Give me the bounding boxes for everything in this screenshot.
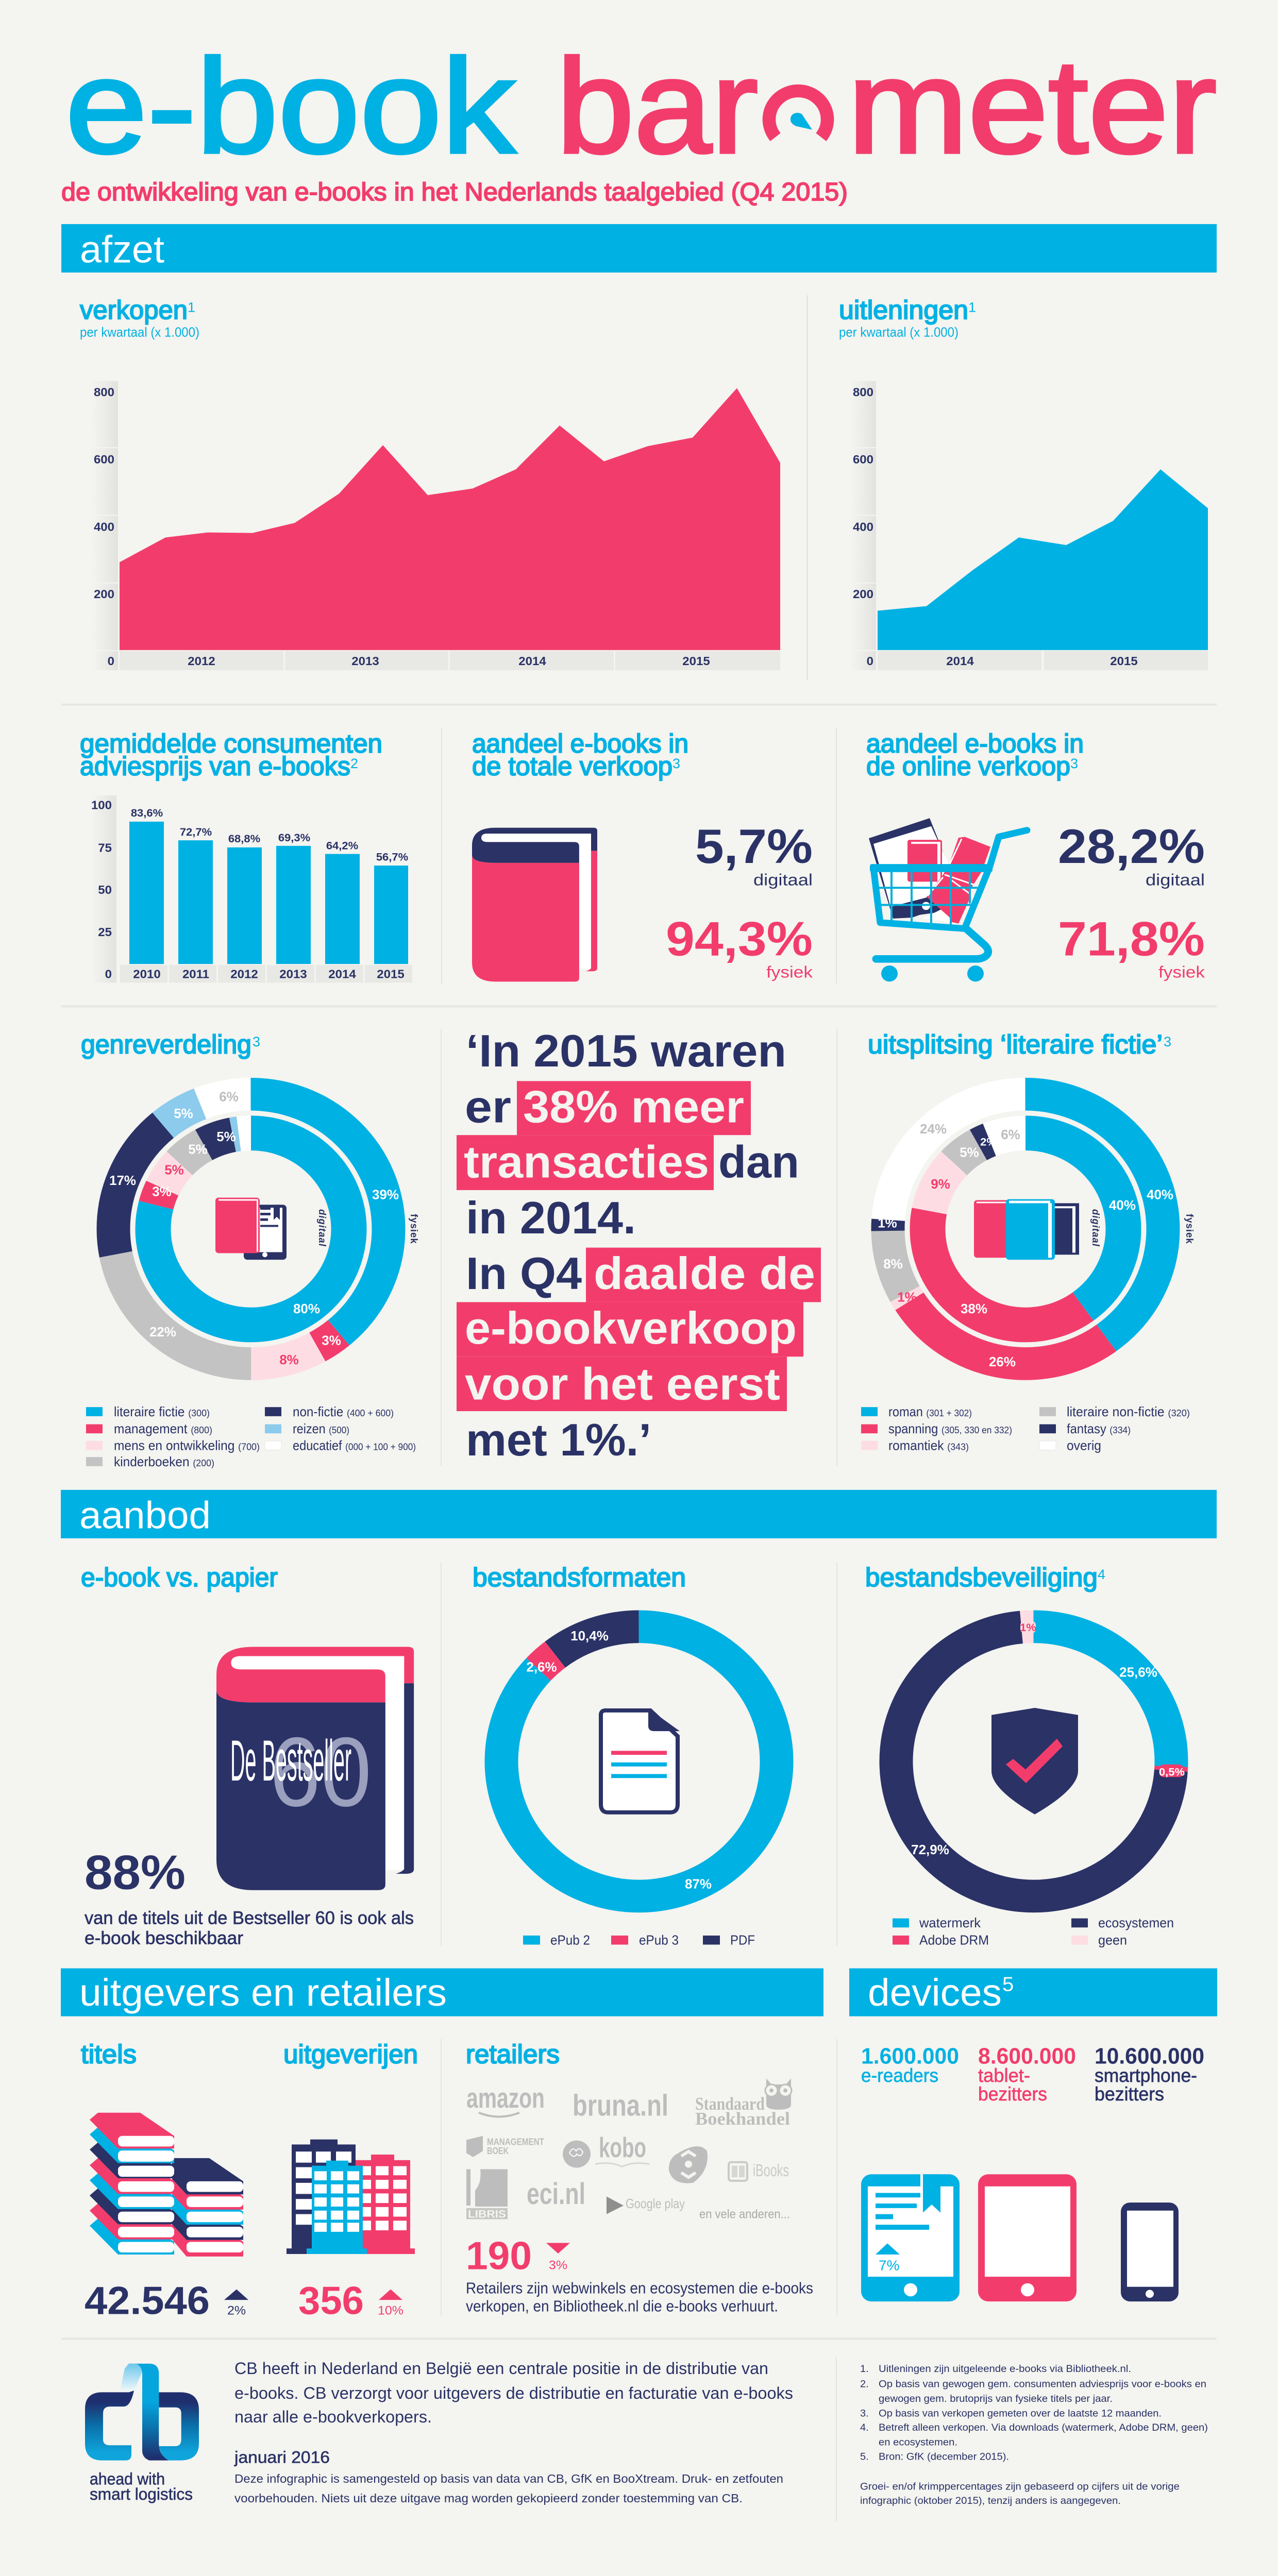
text: about CB: januari 2016 [234, 2448, 330, 2466]
donut chart: genreverdeling: 3% [152, 1185, 172, 1199]
bar chart: adviesprijs: 72,7% [180, 825, 212, 838]
area chart: uitleningen: 600 [853, 453, 873, 466]
figure: 190: 190 [466, 2234, 532, 2278]
legend: bestandsbeveiliging [893, 1916, 1174, 1947]
panel: uitsplitsing literaire fictie [861, 1029, 1195, 1453]
panel: uitleningen [839, 295, 1208, 670]
legend: genreverdeling: reizen (500) [293, 1422, 349, 1436]
bar chart: adviesprijs: 50 [98, 883, 112, 897]
panel: genreverdeling [81, 1029, 419, 1469]
bar chart: adviesprijs: 69,3% [278, 831, 310, 844]
area chart: uitleningen: 400 [853, 520, 873, 534]
legend: uitsplitsing: spanning (305, 330 en 332) [888, 1422, 1012, 1436]
panel: bestandsformaten [473, 1562, 777, 1947]
footnotes: Op basis van verkopen gemeten over de laatste 12 maanden. [879, 2408, 1162, 2419]
panel: titels [81, 2039, 248, 2323]
legend: bestandsformaten: ePub 3 [639, 1934, 679, 1947]
figure: smartphone-bezitters [1095, 2044, 1204, 2105]
legend: uitsplitsing: overig [1067, 1439, 1101, 1453]
bar chart: adviesprijs: 75 [98, 841, 112, 855]
donut chart: uitsplitsing: 40% [1109, 1198, 1136, 1213]
quote: met 1%.’ [466, 1414, 651, 1465]
text: about CB: voorbehouden. Niets uit deze uitgave mag worden gekopieerd zonder toestemming van CB. [234, 2492, 743, 2505]
footnotes: Groei- en/of krimppercentages zijn gebaseerd op cijfers uit de vorige [860, 2481, 1180, 2492]
section bar: aanbod: aanbod [79, 1494, 211, 1536]
legend: bestandsbeveiliging: Adobe DRM [919, 1934, 989, 1947]
donut chart: genreverdeling: 3% [322, 1334, 341, 1348]
heading: verkopen: 1 [188, 300, 195, 315]
section bar: devices: devices [868, 1971, 1002, 2014]
subtitle: de ontwikkeling van e-books in het Nederlands taalgebied (Q4 2015) [61, 178, 848, 206]
legend: bestandsbeveiliging: geen [1098, 1934, 1127, 1947]
logos: retailers: LIBRIS [468, 2208, 506, 2220]
legend: genreverdeling: literaire fictie (300) [114, 1405, 210, 1419]
figure: tablet-bezitters [978, 2044, 1076, 2105]
icon: e-reader [861, 2174, 960, 2301]
area chart: uitleningen: 0 [867, 654, 873, 668]
text: retailers description: Retailers zijn webwinkels en ecosystemen die e-books [466, 2279, 813, 2297]
quote: in 2014. [466, 1192, 636, 1243]
figure: 356: 356 [298, 2279, 364, 2323]
section bar: devices: 5 [1002, 1973, 1014, 1996]
area chart: uitleningen: 800 [853, 385, 873, 399]
icon: buildings [287, 2140, 415, 2254]
bar chart: adviesprijs: 83,6% [131, 806, 163, 819]
title: bar [557, 31, 758, 181]
panel: aandeel online verkoop [866, 728, 1205, 981]
donut chart: bestandsformaten [501, 1626, 777, 1896]
bar chart: adviesprijs: 25 [98, 925, 112, 939]
heading: uitsplitsing: 3 [1164, 1034, 1171, 1049]
figure: 42.546: 2% [227, 2304, 246, 2317]
donut chart: genreverdeling: 5% [188, 1143, 208, 1157]
heading: totale verkoop: 3 [672, 756, 680, 771]
legend: bestandsbeveiliging: ecosystemen [1098, 1916, 1174, 1930]
footnotes: gewogen gem. brutoprijs van fysieke titels per jaar. [879, 2393, 1113, 2404]
donut chart: uitsplitsing [878, 1094, 1195, 1369]
donut chart: genreverdeling: 22% [149, 1325, 176, 1340]
heading: bestandsbeveiliging: bestandsbeveiliging [865, 1562, 1098, 1592]
heading: adviesprijs [80, 728, 382, 781]
legend: bestandsformaten: PDF [730, 1934, 755, 1947]
heading: verkopen [80, 295, 199, 340]
figure: smartphone-bezitters: bezitters [1095, 2083, 1164, 2105]
figure: smartphone-bezitters: smartphone- [1095, 2064, 1197, 2086]
donut chart: uitsplitsing: 26% [989, 1355, 1016, 1369]
figure: tablet-bezitters: 8.600.000 [978, 2044, 1076, 2069]
icon: smartphone [1121, 2202, 1179, 2301]
area chart: verkopen: 0 [108, 654, 114, 668]
donut chart: uitsplitsing: 1% [897, 1291, 917, 1304]
logo: CB: smart logistics [90, 2484, 193, 2503]
figure: 356 [298, 2279, 403, 2323]
heading: bestandsbeveiliging: 4 [1098, 1567, 1105, 1582]
bar chart: adviesprijs: 2014 [328, 968, 356, 981]
donut chart: uitsplitsing: 2% [980, 1136, 997, 1148]
legend: genreverdeling: kinderboeken (200) [114, 1455, 214, 1469]
figure: 28,2% digitaal: 28,2% [1058, 820, 1205, 874]
area chart: uitleningen [850, 381, 1208, 670]
area chart: uitleningen: 2014 [946, 654, 974, 668]
donut chart: genreverdeling: 5% [216, 1130, 236, 1144]
legend: uitsplitsing: fantasy (334) [1067, 1422, 1131, 1436]
title: e-book [65, 31, 517, 181]
quote: daalde de [594, 1248, 815, 1299]
icon: e-reader: 7% [879, 2258, 899, 2273]
legend: uitsplitsing [861, 1405, 1190, 1453]
heading: totale verkoop: de totale verkoop [472, 751, 672, 781]
area chart: verkopen: 2015 [682, 654, 710, 668]
figure: 42.546: 42.546 [85, 2279, 210, 2323]
panel: bestandsbeveiliging [865, 1562, 1185, 1947]
figure: e-readers [861, 2044, 959, 2086]
icon: three books [974, 1199, 1079, 1260]
section bar: afzet: afzet [80, 228, 164, 270]
quote: er [465, 1081, 511, 1132]
figure: tablet-bezitters: tablet- [978, 2064, 1030, 2086]
figure: tablet-bezitters: bezitters [978, 2083, 1047, 2105]
icon: stacks of books [90, 2113, 243, 2257]
donut chart: uitsplitsing: 40% [1147, 1188, 1173, 1202]
bar chart: adviesprijs: 100 [91, 799, 112, 812]
quote: ‘In 2015 waren [466, 1025, 786, 1076]
footnotes: 5. [860, 2451, 869, 2463]
bar chart: adviesprijs: 2011 [182, 968, 209, 981]
area chart: verkopen: 2013 [351, 654, 379, 668]
figure: 28,2% digitaal: digitaal [1146, 871, 1205, 889]
footnotes: Uitleningen zijn uitgeleende e-books via Bibliotheek.nl. [879, 2363, 1131, 2375]
text: bestseller caption [85, 1908, 414, 1948]
heading: verkopen: verkopen [80, 295, 188, 325]
donut chart: bestandsbeveiliging: 25,6% [1119, 1666, 1157, 1680]
donut chart: uitsplitsing: 38% [961, 1302, 987, 1316]
heading: titels: titels [81, 2039, 137, 2069]
logos: retailers: kobo [599, 2131, 646, 2163]
footnotes: Betreft alleen verkopen. Via downloads (watermerk, Adobe DRM, geen) [879, 2422, 1208, 2433]
heading: uitleningen: uitleningen [839, 295, 968, 325]
figure: 94,3% fysiek: fysiek [766, 963, 813, 981]
icon: De Bestseller book: De Bestseller [230, 1728, 351, 1793]
donut chart: uitsplitsing: 1% [878, 1216, 897, 1230]
text: retailers description [466, 2279, 813, 2315]
figure: 356: 10% [378, 2304, 403, 2317]
donut chart: genreverdeling: digitaal [317, 1209, 328, 1247]
figure: e-readers: e-readers [861, 2064, 938, 2086]
donut chart: bestandsformaten: 10,4% [570, 1629, 609, 1643]
heading: online verkoop: de online verkoop [866, 751, 1070, 781]
icon: shield [991, 1708, 1078, 1815]
footnotes: en ecosystemen. [879, 2436, 957, 2448]
logos: retailers: eci.nl [527, 2177, 585, 2211]
panel: uitgeverijen [283, 2039, 418, 2323]
bar chart: adviesprijs: 68,8% [228, 832, 260, 845]
donut chart: bestandsformaten: 2,6% [526, 1660, 557, 1674]
footnotes: Op basis van gewogen gem. consumenten adviesprijs voor e-books en [879, 2379, 1206, 2390]
icon: barometer dial [769, 91, 827, 137]
quote: dan [718, 1136, 799, 1187]
heading: uitsplitsing: uitsplitsing ‘literaire fictie’ [868, 1029, 1163, 1059]
heading: e-book vs. papier: e-book vs. papier [81, 1562, 278, 1592]
figure: 88%: 88% [85, 1846, 186, 1900]
legend: uitsplitsing: roman (301 + 302) [888, 1405, 972, 1419]
figure: 94,3% fysiek: 94,3% [666, 912, 813, 966]
legend: uitsplitsing: literaire non-fictie (320) [1067, 1405, 1190, 1419]
donut chart: uitsplitsing: 8% [883, 1257, 903, 1272]
logos: retailers: bruna.nl [573, 2088, 668, 2122]
figure: smartphone-bezitters: 10.600.000 [1095, 2044, 1204, 2069]
heading: totale verkoop [472, 728, 688, 781]
bar chart: adviesprijs: 2013 [279, 968, 307, 981]
figure: 71,8% fysiek: fysiek [1158, 963, 1205, 981]
quote: transacties [464, 1136, 709, 1187]
figure: 190: 3% [549, 2259, 567, 2272]
legend: uitsplitsing: romantiek (343) [888, 1439, 969, 1453]
figure: 71,8% fysiek: 71,8% [1058, 912, 1205, 966]
panel: retailers [466, 2039, 813, 2315]
donut chart: genreverdeling: 80% [293, 1302, 320, 1316]
panel: verkopen [80, 295, 780, 670]
heading: adviesprijs: gemiddelde consumenten [80, 728, 382, 758]
bar chart: adviesprijs [91, 795, 412, 982]
logo: CB [85, 2364, 199, 2503]
bar chart: adviesprijs: 2012 [230, 968, 258, 981]
figure: 5,7% digitaal: 5,7% [695, 820, 813, 874]
quote: voor het eerst [465, 1358, 780, 1409]
section bar: aanbod [61, 1490, 1217, 1538]
donut chart: genreverdeling: 5% [174, 1107, 193, 1121]
donut chart: genreverdeling: 8% [279, 1353, 299, 1367]
text: bestseller caption: van de titels uit de Bestseller 60 is ook als [85, 1908, 414, 1928]
logos: retailers: en vele anderen... [699, 2208, 790, 2221]
footnotes: infographic (oktober 2015), tenzij anders is aangegeven. [860, 2495, 1121, 2506]
donut chart: genreverdeling: 6% [219, 1090, 239, 1104]
text: about CB: Deze infographic is samengesteld op basis van data van CB, GfK en BooXtream. Druk- en zetfouten [234, 2472, 783, 2486]
icon: tablet [978, 2174, 1077, 2301]
heading: online verkoop [866, 728, 1084, 781]
text: about CB [234, 2359, 793, 2505]
heading: online verkoop: 3 [1070, 756, 1078, 771]
legend: bestandsbeveiliging: watermerk [919, 1916, 981, 1930]
footnotes [860, 2363, 1208, 2506]
donut chart: uitsplitsing: 5% [960, 1146, 979, 1160]
heading: uitleningen [839, 295, 976, 340]
title [65, 31, 1217, 181]
logos: retailers [466, 2078, 792, 2221]
legend: genreverdeling: mens en ontwikkeling (700) [114, 1439, 260, 1453]
heading: verkopen: per kwartaal (x 1.000) [80, 326, 199, 340]
section bar: uitgevers en retailers [61, 1969, 823, 2016]
logos: retailers: Boekhandel [695, 2109, 790, 2129]
icon: book and tablet [215, 1198, 287, 1260]
section bar: afzet [61, 224, 1217, 273]
bar chart: adviesprijs: 56,7% [376, 850, 408, 863]
heading: retailers: retailers [466, 2039, 560, 2069]
icon: De Bestseller book [216, 1647, 414, 1890]
heading: uitleningen: 1 [968, 300, 976, 315]
area chart: uitleningen: 2015 [1110, 654, 1138, 668]
figure: e-readers: 1.600.000 [861, 2044, 959, 2069]
donut chart: genreverdeling: fysiek [409, 1214, 419, 1244]
bar chart: adviesprijs: 2010 [133, 968, 161, 981]
logos: retailers: BOEK [487, 2145, 509, 2156]
area chart: verkopen: 800 [94, 385, 114, 399]
footnotes: 2. [860, 2379, 869, 2390]
footnotes: 3. [860, 2408, 869, 2419]
text: about CB: naar alle e-bookverkopers. [234, 2408, 432, 2426]
bar chart: adviesprijs: 0 [105, 968, 112, 981]
legend: bestandsformaten: ePub 2 [550, 1934, 590, 1947]
heading: genreverdeling: genreverdeling [81, 1029, 251, 1059]
section bar: devices [849, 1969, 1217, 2016]
area chart: verkopen: 600 [94, 453, 114, 466]
quote: e-bookverkoop [465, 1302, 797, 1353]
logos: retailers: iBooks [753, 2161, 789, 2180]
area chart: verkopen: 200 [94, 587, 114, 601]
text: about CB: e-books. CB verzorgt voor uitgevers de distributie en facturatie van e-books [234, 2383, 793, 2402]
icon: pink book [472, 828, 597, 981]
icon: shopping cart [869, 818, 1027, 981]
legend: bestandsformaten [523, 1934, 755, 1947]
title: meter [848, 31, 1217, 181]
donut chart: bestandsformaten: 87% [685, 1877, 712, 1892]
heading: genreverdeling: 3 [253, 1034, 260, 1049]
section bar: uitgevers en retailers: uitgevers en retailers [79, 1971, 447, 2014]
figure: 5,7% digitaal: digitaal [753, 871, 813, 889]
donut chart: genreverdeling: 39% [372, 1188, 399, 1202]
heading: adviesprijs: adviesprijs van e-books [80, 751, 350, 781]
donut chart: uitsplitsing: 9% [931, 1177, 950, 1192]
heading: uitgeverijen: uitgeverijen [283, 2039, 418, 2069]
heading: uitleningen: per kwartaal (x 1.000) [839, 326, 959, 340]
footnotes: 1. [860, 2363, 869, 2375]
logos: retailers: Standaard [695, 2093, 765, 2114]
icon: document [601, 1708, 680, 1812]
area chart: verkopen: 2014 [518, 654, 546, 668]
figure: 190 [466, 2234, 570, 2278]
donut chart: genreverdeling: 5% [164, 1163, 184, 1178]
logos: retailers: amazon [466, 2082, 545, 2114]
area chart: verkopen [91, 381, 780, 670]
text: retailers description: verkopen, en Bibliotheek.nl die e-books verhuurt. [466, 2297, 778, 2315]
panel: aandeel totale verkoop [472, 728, 813, 981]
legend: genreverdeling: educatief (000 + 100 + 900) [293, 1439, 416, 1453]
donut chart: bestandsbeveiliging [896, 1621, 1185, 1896]
heading: online verkoop: aandeel e-books in [866, 728, 1084, 758]
donut chart: uitsplitsing: fysiek [1184, 1214, 1195, 1244]
heading: bestandsformaten: bestandsformaten [473, 1562, 686, 1592]
text: about CB: CB heeft in Nederland en België een centrale positie in de distributie van [234, 2359, 768, 2378]
footnotes: Bron: GfK (december 2015). [879, 2451, 1009, 2463]
legend: genreverdeling [86, 1405, 416, 1469]
legend: genreverdeling: management (800) [114, 1422, 212, 1436]
area chart: verkopen: 2012 [188, 654, 215, 668]
donut chart: genreverdeling: 17% [109, 1174, 136, 1188]
bar chart: adviesprijs: 2015 [377, 968, 405, 981]
area chart: uitleningen: 200 [853, 587, 873, 601]
logo: CB: ahead with [90, 2469, 165, 2488]
area chart: verkopen: 400 [94, 520, 114, 534]
bar chart: adviesprijs: 64,2% [326, 839, 358, 852]
donut chart: bestandsbeveiliging: 72,9% [911, 1843, 949, 1857]
quote [457, 1025, 821, 1465]
donut chart: uitsplitsing: 24% [920, 1122, 947, 1137]
icon: De Bestseller book: 60 [270, 1717, 372, 1827]
footnotes: 4. [860, 2422, 869, 2433]
heading: adviesprijs: 2 [350, 756, 358, 771]
heading: totale verkoop: aandeel e-books in [472, 728, 688, 758]
panel: e-book vs. papier [81, 1562, 414, 1948]
panel: devices [861, 2044, 1204, 2301]
donut chart: bestandsbeveiliging: 0,5% [1159, 1766, 1185, 1778]
legend: genreverdeling: non-fictie (400 + 600) [293, 1405, 394, 1419]
donut chart: bestandsbeveiliging: 1% [1020, 1621, 1036, 1634]
text: bestseller caption: e-book beschikbaar [85, 1928, 243, 1948]
donut chart: genreverdeling [109, 1090, 419, 1367]
logos: retailers: Google play [626, 2197, 685, 2211]
donut chart: uitsplitsing: 6% [1001, 1128, 1020, 1142]
quote: 38% meer [523, 1081, 744, 1132]
quote: In Q4 [466, 1248, 582, 1299]
panel: adviesprijs [80, 728, 412, 982]
logos: retailers: MANAGEMENT [487, 2137, 544, 2147]
donut chart: uitsplitsing: digitaal [1090, 1209, 1101, 1247]
